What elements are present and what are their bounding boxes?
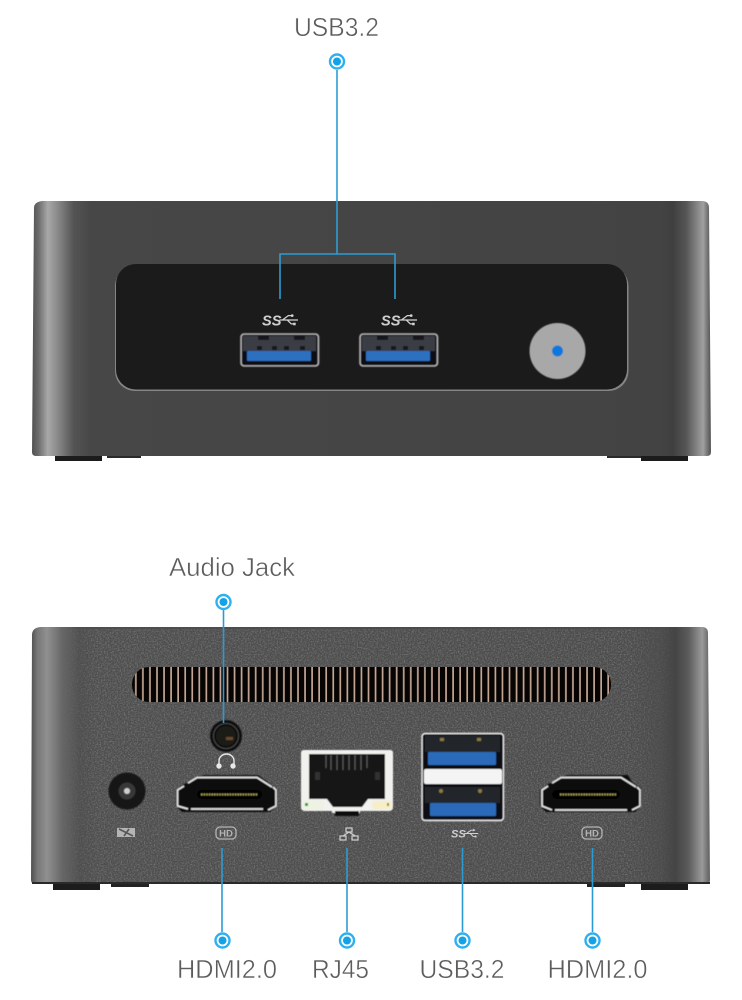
icon: headphones <box>217 754 235 768</box>
icon: SS USB rear <box>451 829 478 841</box>
label: HDMI2.0 right: HDMI2.0 <box>548 954 648 984</box>
feet <box>55 454 688 461</box>
connector: RJ45 <box>340 848 354 948</box>
port: audio jack <box>210 720 242 752</box>
power button <box>530 323 586 379</box>
rear feet <box>53 882 688 890</box>
label: USB3.2 rear: USB3.2 <box>420 954 504 984</box>
port: rear USB stack <box>422 734 504 820</box>
icon: HD right: HD <box>585 828 599 840</box>
device: rear view <box>31 627 710 890</box>
icon: HD right <box>582 827 602 840</box>
port: HDMI right <box>540 775 641 812</box>
device: front view <box>32 201 711 461</box>
icon: SS USB right <box>381 313 417 329</box>
icon: HD left: HD <box>219 828 233 840</box>
port: front USB left <box>241 334 318 366</box>
vent <box>132 667 611 702</box>
icon: SS USB left <box>262 313 298 329</box>
port: RJ45 <box>301 750 393 816</box>
connector: top USB3.2 <box>280 54 395 299</box>
label: top USB3.2: USB3.2 <box>294 12 379 42</box>
front black panel <box>115 264 628 391</box>
icon: network <box>340 828 358 840</box>
port: power jack <box>108 772 146 810</box>
rear body <box>31 627 710 884</box>
connector: HDMI left <box>216 848 230 948</box>
port: HDMI left <box>176 775 276 812</box>
icon: power symbol <box>117 828 135 837</box>
label: Audio Jack: Audio Jack <box>169 552 296 582</box>
front body <box>32 201 711 456</box>
connector: Audio Jack <box>216 595 230 723</box>
label: RJ45: RJ45 <box>312 954 369 984</box>
port: front USB right <box>360 334 438 366</box>
label: HDMI2.0 left: HDMI2.0 <box>177 954 277 984</box>
connector: USB3.2 rear <box>456 848 470 948</box>
connector: HDMI right <box>586 848 600 948</box>
icon: HD left <box>216 827 236 840</box>
